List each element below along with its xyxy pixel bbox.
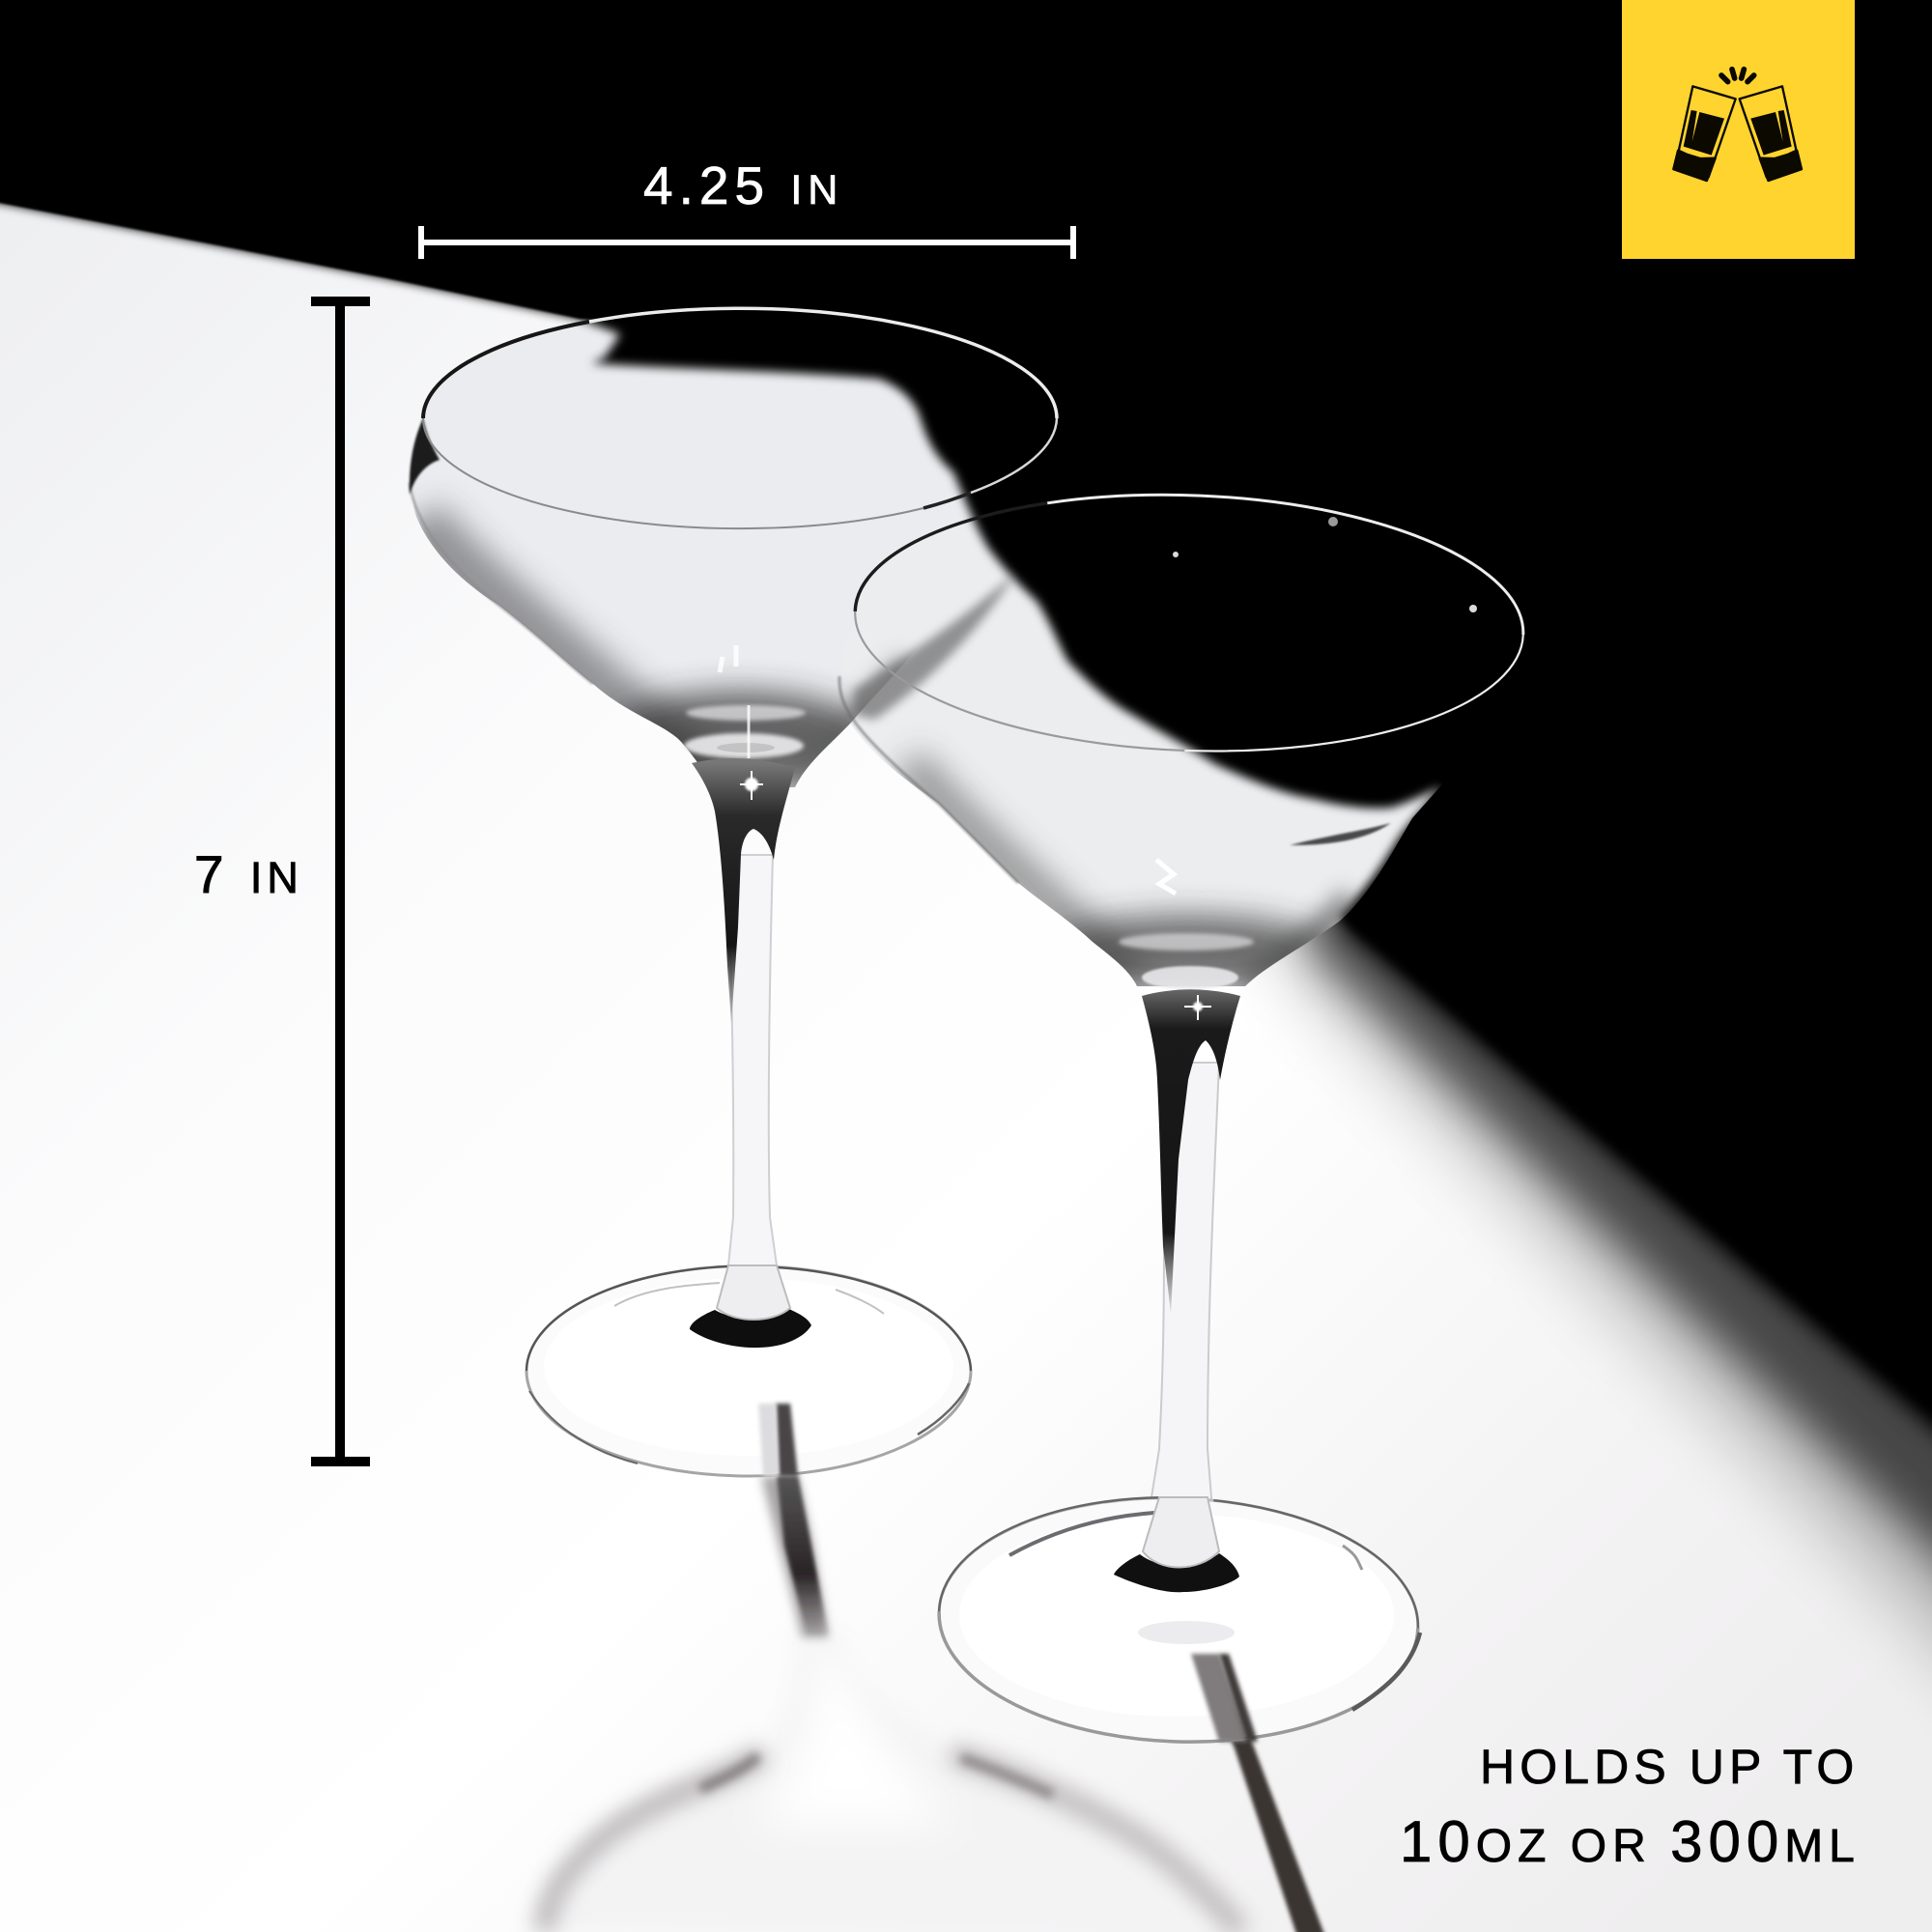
right glass rim sparkles [1173,517,1477,612]
dimension: height bracket [311,297,370,1466]
left glass stem knot [690,1308,811,1348]
right glass base-of-bowl highlights [1119,823,1391,989]
left glass base-of-bowl highlights [684,645,806,758]
icon: clinking glasses [1674,70,1802,181]
left glass foot [526,1265,971,1476]
stem shadow of right glass [1190,1647,1325,1932]
icon: left shot glass [1674,86,1736,181]
blurred bowl shadow on the table [544,1633,1241,1932]
capacity text: HOLDS UP TO [1480,1740,1859,1794]
right glass stem knot [1114,1553,1239,1592]
right glass bowl body fill [842,484,1527,986]
crisp top-left shadow edge [0,0,869,328]
soft diagonal shadow edge [1256,676,1932,1932]
stem shadow of left glass [761,1476,829,1637]
left glass rim [423,308,1057,528]
left glass lower bowl shading [415,522,908,787]
left glass [410,308,1057,1476]
dimension: width bracket [418,226,1076,259]
right glass rim [851,484,1527,762]
grey reflection of left bowl through right glass [854,572,1016,720]
black background with shadow edge seen through the glasses [0,0,1932,1430]
capacity text: 10OZ OR 300ML [1400,1809,1861,1874]
right glass left outer edge [839,676,1018,883]
capacity text [1400,1740,1861,1874]
left glass outer left edge wedge [410,483,593,684]
right glass foot [935,1490,1422,1750]
icon: right shot glass [1740,86,1802,181]
right glass [839,484,1527,1750]
label: 7 in: 7 IN [194,844,303,904]
left glass stem [692,758,795,1265]
right glass lower bowl shading [908,763,1352,988]
icon: clink sparks [1721,70,1754,82]
label: 4.25 in: 4.25 IN [643,156,843,215]
left glass bowl body fill [412,308,1069,787]
right glass stem [1142,989,1240,1546]
yellow badge [1622,0,1855,259]
